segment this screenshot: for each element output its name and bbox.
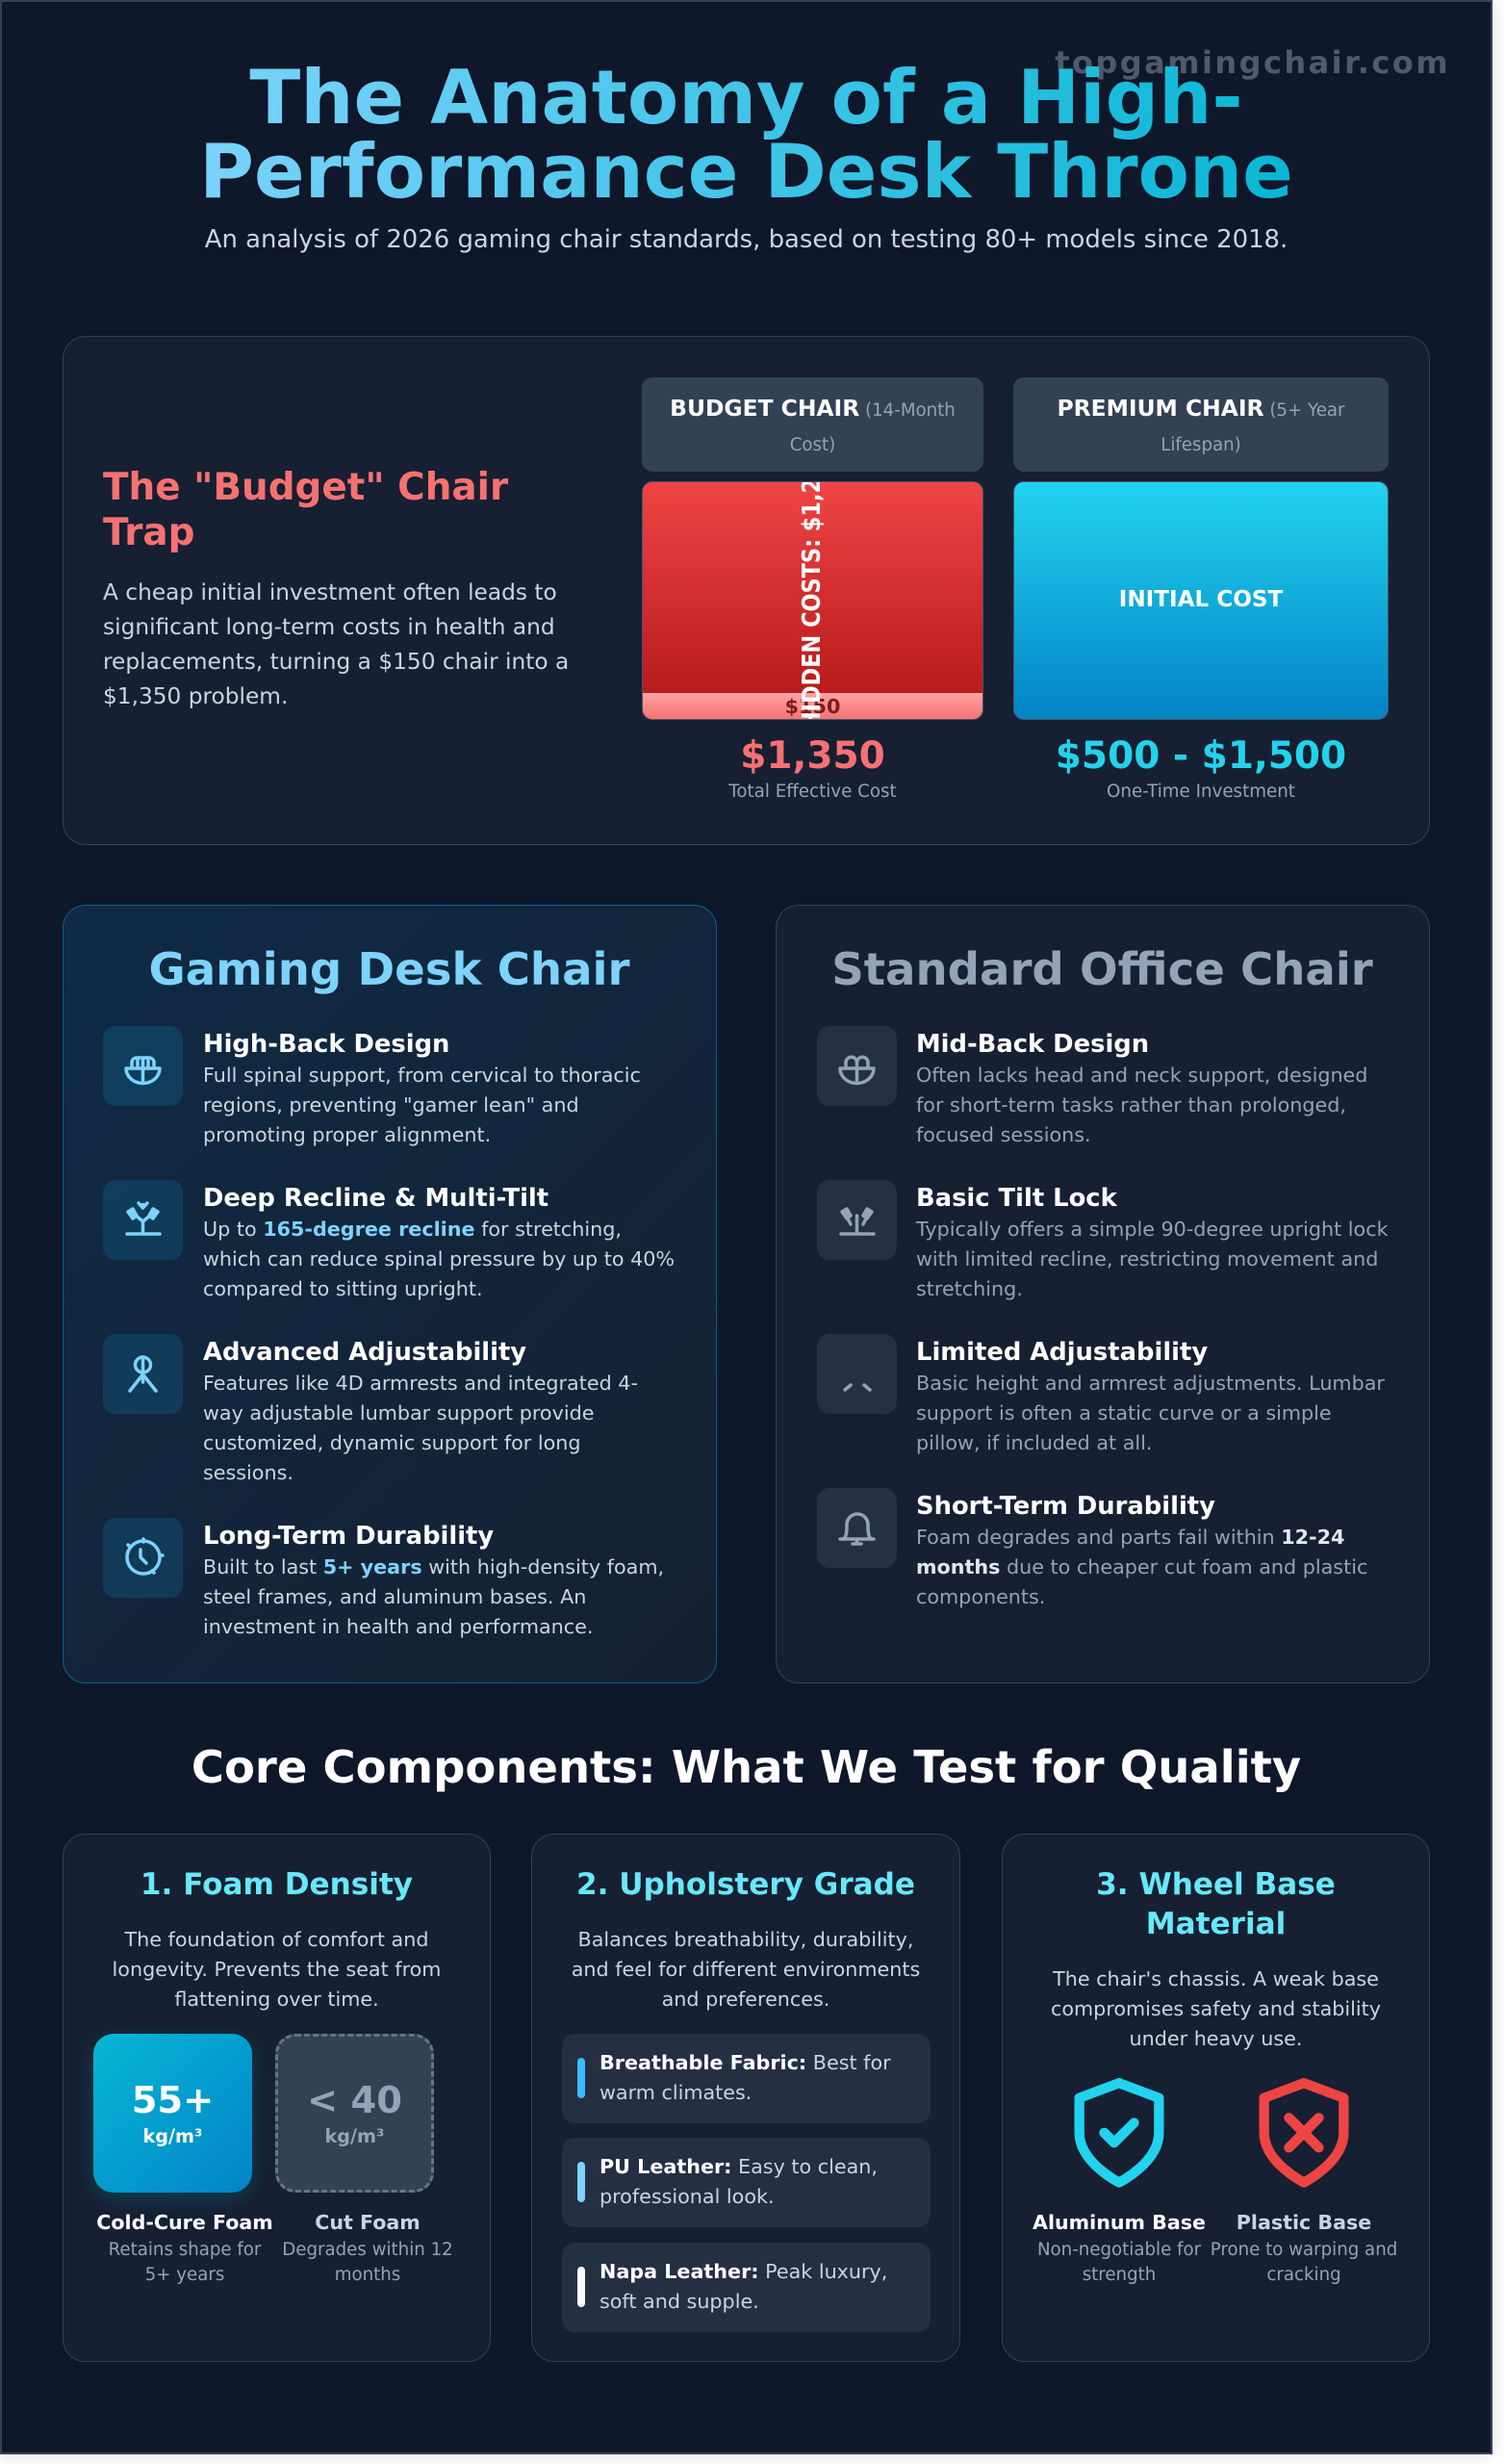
feature: deep recline: compared to sitting upright. — [203, 1277, 483, 1300]
feature: basic tilt lock — [817, 1180, 1389, 1300]
feature: mid-back design: Mid-Back Design — [916, 1030, 1149, 1059]
feature: long-term durability: Built to last 5+ years with high-density foam, — [203, 1555, 664, 1578]
budget chair header: Cost) — [790, 435, 835, 455]
feature: short-term durability — [817, 1488, 1367, 1608]
cut foam label: Cut Foam — [315, 2211, 421, 2234]
feature: deep recline: Up to 165-degree recline for stretching, — [203, 1218, 622, 1241]
icon: recline arrows — [103, 1180, 183, 1260]
budget chair header: BUDGET CHAIR (14-Month — [670, 395, 956, 422]
budget chair bar — [642, 481, 983, 720]
wheel base description: under heavy use. — [1130, 2027, 1302, 2050]
trap description: A cheap initial investment often leads to — [103, 579, 557, 605]
trap description — [103, 579, 569, 709]
icon: cross shield — [1259, 2078, 1349, 2188]
wheel base heading — [1096, 1867, 1336, 1941]
gaming heading: Gaming Desk Chair — [149, 943, 629, 995]
feature: high-back design — [103, 1026, 641, 1146]
panel: budget chair trap — [63, 336, 1430, 845]
title: The Anatomy of a High- — [249, 55, 1243, 141]
cut foam label: months — [335, 2265, 400, 2285]
trap heading — [103, 466, 508, 554]
feature: mid-back design: for short-term tasks rather than prolonged, — [916, 1093, 1346, 1116]
icon: ticks — [817, 1334, 897, 1414]
wheel base description: compromises safety and stability — [1051, 1997, 1381, 2020]
upholstery item: napa leather — [562, 2243, 931, 2332]
foam tile: under 40 — [275, 2034, 434, 2193]
feature: mid-back design: focused sessions. — [916, 1123, 1091, 1146]
premium chair bar — [1013, 481, 1389, 720]
foam tile: under 40: < 40 — [307, 2079, 402, 2122]
panel: gaming desk chair — [63, 905, 717, 1683]
trap heading: Trap — [103, 511, 195, 554]
wheel base heading: 3. Wheel Base — [1096, 1867, 1336, 1902]
icon: adjust figure — [103, 1334, 183, 1414]
upholstery description: Balances breathability, durability, — [578, 1928, 913, 1951]
cold-cure label: Retains shape for — [109, 2240, 261, 2260]
feature: advanced adjustability: Features like 4D armrests and integrated 4- — [203, 1372, 638, 1395]
aluminum base label: Aluminum Base — [1033, 2211, 1206, 2234]
office heading: Standard Office Chair — [831, 943, 1373, 995]
feature: mid-back design — [817, 1026, 1367, 1146]
feature: high-back design: High-Back Design — [203, 1030, 449, 1059]
feature: limited adjustability: pillow, if included at all. — [916, 1431, 1152, 1454]
premium chair header: Lifespan) — [1161, 435, 1241, 455]
feature: deep recline: which can reduce spinal pressure by up to 40% — [203, 1247, 675, 1270]
foam tile: 55+: kg/m³ — [143, 2125, 202, 2147]
plastic base label: cracking — [1266, 2265, 1341, 2285]
budget total: $1,350 — [740, 734, 885, 778]
premium caption: One-Time Investment — [1107, 782, 1295, 802]
upholstery heading: 2. Upholstery Grade — [576, 1867, 915, 1902]
watermark: topgamingchair.com — [1055, 44, 1450, 81]
icon: bell — [817, 1488, 897, 1568]
upholstery description — [572, 1928, 920, 2011]
feature: basic tilt lock: stretching. — [916, 1277, 1023, 1300]
initial cost segment: $150 — [643, 693, 982, 719]
feature: high-back design: regions, preventing "gamer lean" and — [203, 1093, 579, 1116]
feature: limited adjustability: support is often a static curve or a simple — [916, 1401, 1332, 1424]
feature: advanced adjustability: customized, dynamic support for long — [203, 1431, 581, 1454]
card: foam density — [63, 1834, 491, 2362]
cold-cure label — [96, 2211, 273, 2285]
premium chair bar: INITIAL COST — [1119, 587, 1283, 612]
feature: short-term durability: months due to cheaper cut foam and plastic — [916, 1555, 1367, 1578]
budget caption: Total Effective Cost — [728, 782, 897, 802]
icon: mid-back — [817, 1026, 897, 1106]
feature: long-term durability — [103, 1518, 664, 1638]
feature: long-term durability: investment in health and performance. — [203, 1615, 593, 1638]
title — [188, 62, 1305, 210]
panel: standard office chair — [776, 905, 1430, 1683]
upholstery item: pu leather: PU Leather: Easy to clean, — [599, 2155, 878, 2178]
card: upholstery grade — [531, 1834, 960, 2362]
foam heading: 1. Foam Density — [140, 1867, 413, 1902]
feature: limited adjustability — [817, 1334, 1385, 1454]
icon: check shield — [1074, 2078, 1164, 2188]
trap description: replacements, turning a $150 chair into a — [103, 649, 569, 675]
upholstery description: and preferences. — [662, 1988, 829, 2011]
plastic base label — [1211, 2211, 1397, 2285]
feature: high-back design: Full spinal support, from cervical to thoracic — [203, 1064, 641, 1087]
premium total: $500 - $1,500 — [1056, 734, 1346, 778]
foam tile: under 40: kg/m³ — [325, 2125, 384, 2147]
feature: advanced adjustability: sessions. — [203, 1461, 293, 1484]
initial cost segment: $150: $150 — [785, 695, 840, 718]
wheel base description — [1051, 1967, 1381, 2050]
feature: advanced adjustability — [103, 1334, 638, 1484]
foam tile: 55+ — [93, 2034, 252, 2193]
cut foam label: Degrades within 12 — [282, 2240, 453, 2260]
feature: high-back design: promoting proper alignment. — [203, 1123, 491, 1146]
feature: long-term durability: Long-Term Durability — [203, 1522, 494, 1551]
cut foam label — [282, 2211, 453, 2285]
premium chair header — [1013, 377, 1389, 472]
upholstery item: breathable fabric — [562, 2034, 931, 2123]
upholstery item: napa leather: Napa Leather: Peak luxury, — [599, 2260, 887, 2283]
feature: limited adjustability: Basic height and armrest adjustments. Lumbar — [916, 1372, 1385, 1395]
feature: long-term durability: steel frames, and aluminum bases. An — [203, 1585, 586, 1608]
title: Performance Desk Throne — [199, 129, 1293, 216]
feature: limited adjustability: Limited Adjustability — [916, 1338, 1208, 1367]
cold-cure label: Cold-Cure Foam — [96, 2211, 273, 2234]
premium chair header: PREMIUM CHAIR (5+ Year — [1057, 395, 1345, 422]
budget chair header — [642, 377, 983, 472]
trap description: $1,350 problem. — [103, 683, 288, 709]
feature: advanced adjustability: Advanced Adjustability — [203, 1338, 526, 1367]
feature: short-term durability: Foam degrades and parts fail within 12-24 — [916, 1526, 1344, 1549]
subtitle: An analysis of 2026 gaming chair standards, based on testing 80+ models since 2018. — [205, 225, 1288, 254]
cold-cure label: 5+ years — [145, 2265, 224, 2285]
plastic base label: Plastic Base — [1237, 2211, 1371, 2234]
section heading: core components: Core Components: What We Test for Quality — [191, 1741, 1301, 1793]
feature: advanced adjustability: way adjustable lumbar support provide — [203, 1401, 594, 1424]
trap description: significant long-term costs in health and — [103, 614, 555, 640]
icon: tilt — [817, 1180, 897, 1260]
upholstery item: pu leather: professional look. — [599, 2185, 775, 2208]
feature: deep recline: Deep Recline & Multi-Tilt — [203, 1184, 548, 1213]
upholstery item: pu leather — [562, 2138, 931, 2227]
upholstery item: breathable fabric: Breathable Fabric: Best for — [599, 2051, 891, 2074]
upholstery item: napa leather: soft and supple. — [599, 2290, 759, 2313]
feature: mid-back design: Often lacks head and neck support, designed — [916, 1064, 1367, 1087]
feature: short-term durability: components. — [916, 1585, 1045, 1608]
icon: headrest — [103, 1026, 183, 1106]
aluminum base label: Non-negotiable for — [1037, 2240, 1201, 2260]
aluminum base label: strength — [1083, 2265, 1156, 2285]
foam description: The foundation of comfort and — [125, 1928, 428, 1951]
feature: basic tilt lock: Typically offers a simple 90-degree upright lock — [916, 1218, 1389, 1241]
upholstery description: and feel for different environments — [572, 1958, 920, 1981]
wheel base description: The chair's chassis. A weak base — [1053, 1967, 1379, 1990]
feature: short-term durability: Short-Term Durability — [916, 1492, 1215, 1521]
aluminum base label — [1033, 2211, 1206, 2285]
feature: deep recline — [103, 1180, 675, 1300]
feature: basic tilt lock: Basic Tilt Lock — [916, 1184, 1117, 1213]
plastic base label: Prone to warping and — [1211, 2240, 1397, 2260]
foam description: flattening over time. — [174, 1988, 379, 2011]
foam tile: 55+: 55+ — [132, 2079, 214, 2122]
feature: basic tilt lock: with limited recline, restricting movement and — [916, 1247, 1378, 1270]
upholstery item: breathable fabric: warm climates. — [599, 2081, 752, 2104]
icon: clock — [103, 1518, 183, 1598]
foam description — [113, 1928, 441, 2011]
card: wheel base material — [1002, 1834, 1430, 2362]
foam description: longevity. Prevents the seat from — [113, 1958, 441, 1981]
trap heading: The "Budget" Chair — [103, 466, 508, 509]
wheel base heading: Material — [1146, 1907, 1286, 1941]
